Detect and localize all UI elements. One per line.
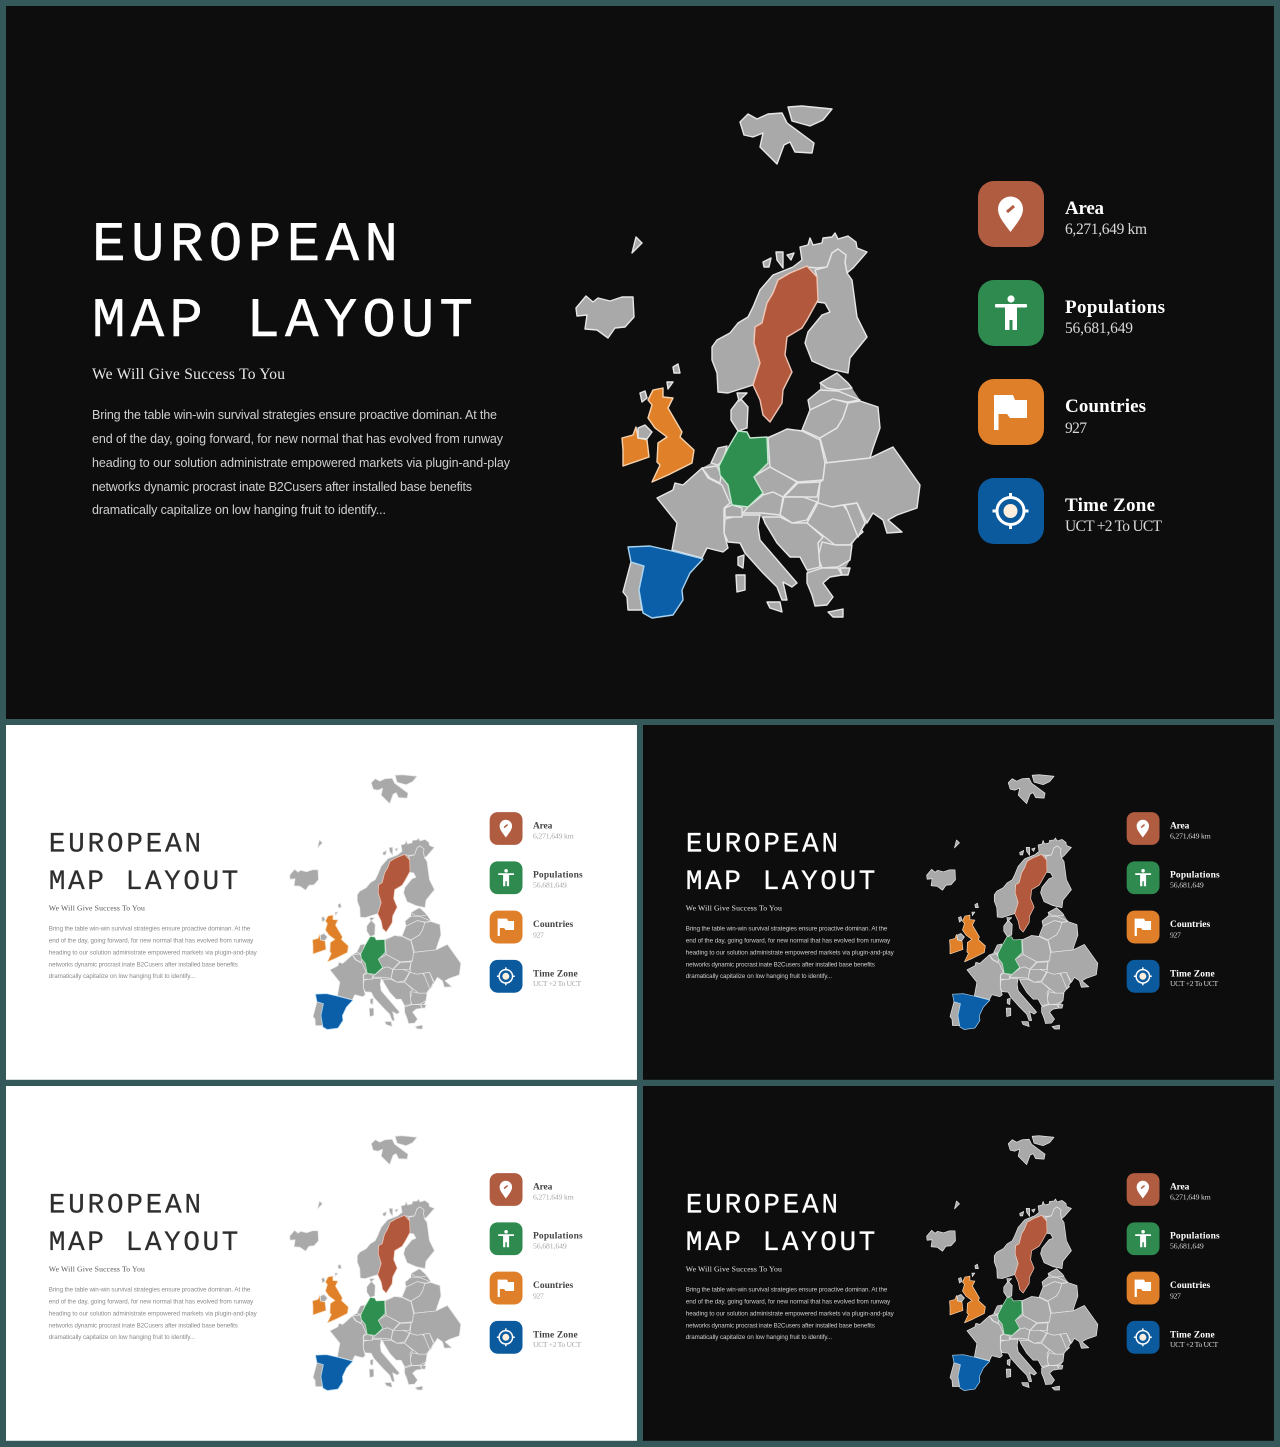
stats list: 56,681,649 xyxy=(533,881,567,890)
panel: main dark slide xyxy=(6,6,1274,719)
Central Europe xyxy=(743,467,820,523)
body text: dramatically capitalize on low hanging fruit to identify... xyxy=(686,1334,832,1341)
body text: heading to our solution administrate empowered markets via plugin-and-play xyxy=(686,1310,895,1317)
stats list: UCT +2 To UCT xyxy=(533,979,582,988)
body text: networks dynamic procrast inate B2Cusers after installed base benefits xyxy=(92,480,472,494)
stats list: Countries xyxy=(533,1281,574,1291)
body text: networks dynamic procrast inate B2Cusers after installed base benefits xyxy=(686,961,875,968)
body text: networks dynamic procrast inate B2Cusers after installed base benefits xyxy=(49,1322,238,1329)
stats list xyxy=(533,1183,583,1349)
body text: Bring the table win-win survival strategies ensure proactive dominan. At the xyxy=(49,926,251,933)
title xyxy=(686,1190,875,1259)
stats list xyxy=(1170,822,1220,988)
stat: time zone: UCT +2 To UCT xyxy=(1065,518,1163,535)
stat: populations: Populations xyxy=(1065,297,1165,318)
body text: end of the day, going forward, for new normal that has evolved from runway xyxy=(686,937,891,944)
body text: heading to our solution administrate empowered markets via plugin-and-play xyxy=(92,456,511,470)
Ukraine xyxy=(818,447,920,533)
stat: time zone: Time Zone xyxy=(1065,495,1155,516)
stats list: UCT +2 To UCT xyxy=(1170,979,1219,988)
stats list: Time Zone xyxy=(533,969,578,979)
title: MAP LAYOUT xyxy=(49,1228,238,1259)
stats list: 6,271,649 km xyxy=(533,831,574,840)
stat: countries xyxy=(1065,396,1146,437)
body text: dramatically capitalize on low hanging fruit to identify... xyxy=(49,973,195,980)
stats list: Populations xyxy=(533,1232,583,1242)
Ireland xyxy=(622,427,649,466)
icons xyxy=(1127,812,1160,993)
stats list xyxy=(1170,1183,1220,1349)
stats list: Countries xyxy=(533,920,574,930)
stats list: 6,271,649 km xyxy=(1170,1192,1211,1201)
body text: heading to our solution administrate empowered markets via plugin-and-play xyxy=(686,949,895,956)
stats list: 56,681,649 xyxy=(1170,1242,1204,1251)
body text: Bring the table win-win survival strategies ensure proactive dominan. At the xyxy=(92,408,497,422)
title: MAP LAYOUT xyxy=(92,289,473,353)
body text: end of the day, going forward, for new normal that has evolved from runway xyxy=(92,432,504,446)
map of Europe xyxy=(927,1136,1098,1391)
title: EUROPEAN xyxy=(686,1190,838,1221)
body text: end of the day, going forward, for new normal that has evolved from runway xyxy=(49,937,254,944)
Baltics and Belarus xyxy=(802,373,880,463)
stats list xyxy=(533,822,583,988)
map of Europe xyxy=(290,1136,461,1391)
Spain xyxy=(628,546,703,618)
Finland xyxy=(805,249,867,373)
body text: networks dynamic procrast inate B2Cusers after installed base benefits xyxy=(686,1322,875,1329)
title xyxy=(92,213,473,353)
subtitle: We Will Give Success To You xyxy=(686,904,782,913)
body text xyxy=(49,1287,258,1341)
Jan Mayen xyxy=(632,237,642,253)
map of Europe xyxy=(576,106,920,618)
France xyxy=(657,468,730,558)
body text: Bring the table win-win survival strategies ensure proactive dominan. At the xyxy=(49,1287,251,1294)
stats list: Countries xyxy=(1170,1281,1211,1291)
icons xyxy=(490,812,523,993)
Iceland xyxy=(576,296,634,338)
stat: countries: Countries xyxy=(1065,396,1146,417)
subtitle: We Will Give Success To You xyxy=(49,1265,145,1274)
Germany xyxy=(719,431,768,507)
subtitle: We Will Give Success To You xyxy=(49,904,145,913)
stats list: Area xyxy=(533,1183,553,1193)
body text: end of the day, going forward, for new normal that has evolved from runway xyxy=(686,1298,891,1305)
Balkans xyxy=(763,503,865,617)
Norway xyxy=(712,233,867,393)
title: MAP LAYOUT xyxy=(686,867,875,898)
stats list: Time Zone xyxy=(1170,969,1215,979)
body text: networks dynamic procrast inate B2Cusers after installed base benefits xyxy=(49,961,238,968)
Sweden xyxy=(753,266,818,422)
Denmark xyxy=(731,393,748,431)
stats list: 927 xyxy=(533,930,544,939)
body text xyxy=(92,408,511,517)
stats list: Populations xyxy=(1170,871,1220,881)
stats list: 56,681,649 xyxy=(533,1242,567,1251)
body text xyxy=(686,926,895,980)
body text: Bring the table win-win survival strategies ensure proactive dominan. At the xyxy=(686,1287,888,1294)
body text: dramatically capitalize on low hanging fruit to identify... xyxy=(686,973,832,980)
icon: target xyxy=(978,478,1044,544)
stat: area xyxy=(1065,198,1147,238)
Poland xyxy=(768,429,825,482)
northern islands xyxy=(640,252,794,402)
subtitle: We Will Give Success To You xyxy=(686,1265,782,1274)
stats list: Populations xyxy=(533,871,583,881)
stat: countries: 927 xyxy=(1065,420,1087,437)
body text: end of the day, going forward, for new normal that has evolved from runway xyxy=(49,1298,254,1305)
Benelux xyxy=(702,446,727,483)
body text xyxy=(49,926,258,980)
panel: white slide top left xyxy=(6,725,637,1080)
title xyxy=(49,1190,238,1259)
stats list: Time Zone xyxy=(1170,1330,1215,1340)
stats list: 6,271,649 km xyxy=(1170,831,1211,840)
stat: populations: 56,681,649 xyxy=(1065,320,1133,337)
body text xyxy=(686,1287,895,1341)
stats list: Populations xyxy=(1170,1232,1220,1242)
stats list: 927 xyxy=(533,1291,544,1300)
panel: dark slide bottom right xyxy=(643,1086,1274,1441)
map of Europe xyxy=(927,775,1098,1030)
panel: white slide bottom left xyxy=(6,1086,637,1441)
body text: Bring the table win-win survival strategies ensure proactive dominan. At the xyxy=(686,926,888,933)
body text: dramatically capitalize on low hanging fruit to identify... xyxy=(49,1334,195,1341)
Italy and islands xyxy=(724,515,797,612)
icon: flag xyxy=(978,379,1044,445)
panel: dark slide top right xyxy=(643,725,1274,1080)
body text: heading to our solution administrate empowered markets via plugin-and-play xyxy=(49,1310,258,1317)
subtitle: We Will Give Success To You xyxy=(92,366,285,383)
title: EUROPEAN xyxy=(92,213,398,277)
stats list: 927 xyxy=(1170,1291,1181,1300)
title: EUROPEAN xyxy=(686,829,838,860)
stat: area: 6,271,649 km xyxy=(1065,221,1147,238)
title: MAP LAYOUT xyxy=(686,1228,875,1259)
body text: dramatically capitalize on low hanging fruit to identify... xyxy=(92,503,386,517)
body text: heading to our solution administrate empowered markets via plugin-and-play xyxy=(49,949,258,956)
map of Europe xyxy=(290,775,461,1030)
stats list: Countries xyxy=(1170,920,1211,930)
title xyxy=(49,829,238,898)
icon: person xyxy=(978,280,1044,346)
title: EUROPEAN xyxy=(49,829,201,860)
stats list: Area xyxy=(1170,1183,1190,1193)
Portugal xyxy=(623,562,644,610)
icon: area pin xyxy=(978,181,1044,247)
mainland backing xyxy=(657,249,920,606)
stat: populations xyxy=(1065,297,1165,337)
Svalbard xyxy=(740,106,832,164)
icons xyxy=(490,1173,523,1354)
Northern Ireland xyxy=(638,425,652,439)
stats list: Area xyxy=(533,822,553,832)
stats list: UCT +2 To UCT xyxy=(1170,1340,1219,1349)
stats list: 927 xyxy=(1170,930,1181,939)
stat: time zone xyxy=(1065,495,1163,535)
stats list: 6,271,649 km xyxy=(533,1192,574,1201)
stats list: UCT +2 To UCT xyxy=(533,1340,582,1349)
stat: area: Area xyxy=(1065,198,1104,219)
title: EUROPEAN xyxy=(49,1190,201,1221)
stats list: 56,681,649 xyxy=(1170,881,1204,890)
title xyxy=(686,829,875,898)
Switzerland xyxy=(725,505,742,517)
title: MAP LAYOUT xyxy=(49,867,238,898)
stats list: Area xyxy=(1170,822,1190,832)
icons xyxy=(1127,1173,1160,1354)
stats list: Time Zone xyxy=(533,1330,578,1340)
United Kingdom xyxy=(648,388,694,482)
